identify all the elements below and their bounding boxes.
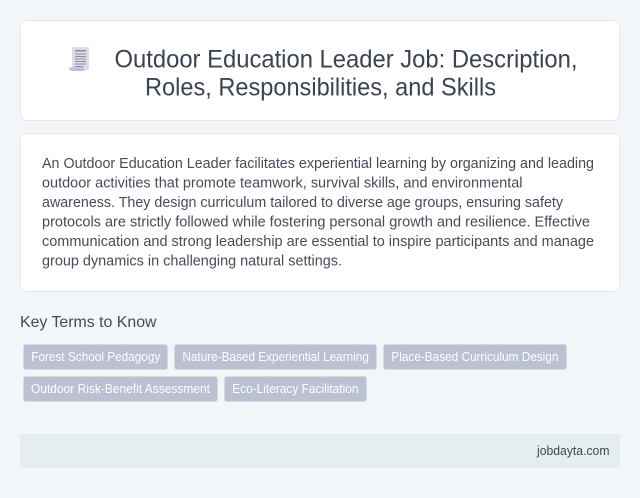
tag: Place-Based Curriculum Design: [384, 344, 566, 370]
heading: title: Roles, Responsibilities, and Skills: [145, 74, 496, 102]
tag: Eco-Literacy Facilitation: Eco-Literacy Facilitation: [232, 382, 359, 396]
tag: Nature-Based Experiential Learning: Nature-Based Experiential Learning: [182, 350, 369, 364]
tag: Outdoor Risk-Benefit Assessment: Outdoor Risk-Benefit Assessment: [31, 382, 210, 396]
tag: Outdoor Risk-Benefit Assessment: [24, 376, 218, 402]
tag list: [24, 344, 566, 402]
tag: Forest School Pedagogy: [24, 344, 168, 370]
heading: title: Outdoor Education Leader Job: Description,: [114, 46, 578, 74]
text block: description: communication and strong leadership are essential to inspire participants and manage: [42, 234, 594, 250]
heading: key terms: Key Terms to Know: [20, 314, 157, 331]
panel: description card: [20, 134, 620, 292]
tag: Nature-Based Experiential Learning: [174, 344, 376, 370]
text block: description: [42, 156, 594, 270]
text block: description: awareness. They design curriculum tailored to diverse age groups, ensuring safety: [42, 195, 564, 211]
text block: description: An Outdoor Education Leader facilitates experiential learning by organizing and leading: [42, 156, 594, 172]
panel: title card: [20, 20, 620, 120]
text block: description: group dynamics in challenging natural settings.: [42, 254, 342, 270]
footer: [20, 434, 620, 468]
text block: description: protocols are strictly followed while fostering personal growth and resilience. Effective: [42, 214, 590, 230]
tag: Eco-Literacy Facilitation: [224, 376, 366, 402]
tag: Place-Based Curriculum Design: Place-Based Curriculum Design: [391, 350, 558, 364]
text block: description: outdoor activities that promote teamwork, survival skills, and environmental: [42, 176, 522, 192]
heading: title: [114, 46, 578, 102]
icon: document scroll: [69, 46, 89, 71]
tag: Forest School Pedagogy: Forest School Pedagogy: [31, 350, 161, 364]
footer: jobdayta.com: [536, 444, 610, 458]
